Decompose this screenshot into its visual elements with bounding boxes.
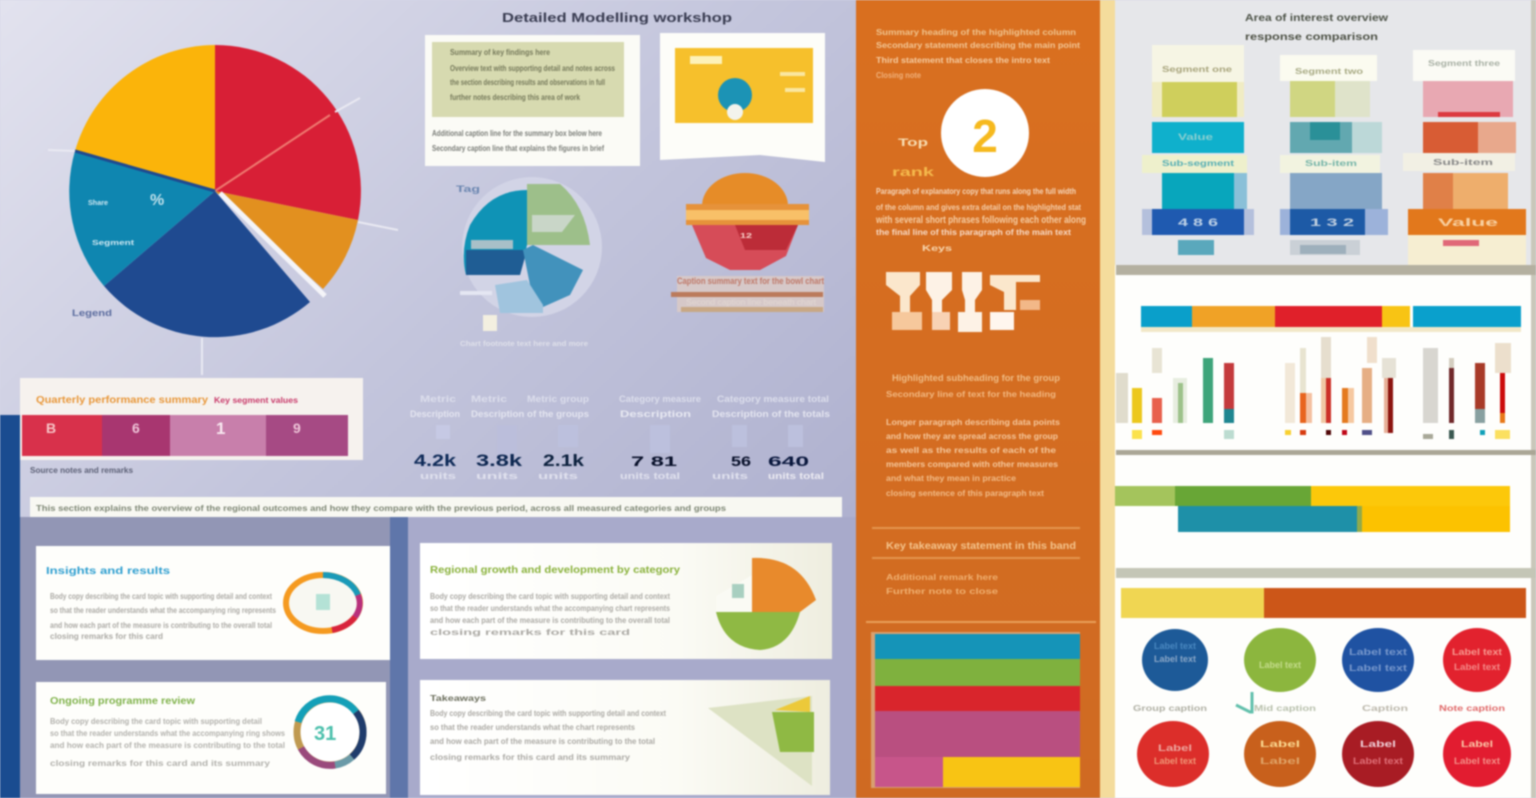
donut chart: Chart footnote text here and more <box>460 341 588 348</box>
icon: people row <box>886 272 1040 332</box>
stat columns: 2.1k <box>543 451 585 470</box>
badge captions: Mid caption <box>1254 704 1316 713</box>
badge row one <box>1142 628 1511 692</box>
panel: card three: Ongoing programme review <box>50 696 195 707</box>
panel: orange column: Highlighted subheading for the group <box>892 373 1060 384</box>
panel: color stat strip: 6 <box>132 420 140 436</box>
panel: card four: and how each part of the measure is contributing to the total <box>430 737 655 746</box>
panel: color stat strip: 1 <box>216 419 225 438</box>
panel: top text box: further notes describing this area of work <box>450 93 580 102</box>
panel: card four: closing remarks for this card and its summary <box>430 753 631 762</box>
badge row one: Label text <box>1454 662 1500 672</box>
panel: card three: Body copy describing the card topic with supporting detail <box>50 717 262 726</box>
title: center section: Detailed Modelling workshop <box>502 10 732 25</box>
column: warm stack: Segment three <box>1428 59 1501 68</box>
panel: right column background <box>1115 0 1536 798</box>
badge row two: Label <box>1260 756 1300 766</box>
stat columns: 3.8k <box>476 451 523 470</box>
pie chart: Segment <box>92 240 135 247</box>
panel: orange column: with several short phrases following each other along <box>875 215 1086 226</box>
panel: color stat strip: Key segment values <box>214 396 299 405</box>
badge row two: Label <box>1260 739 1300 749</box>
pie chart: Share <box>88 200 108 207</box>
icon: medal circle: 2 <box>972 110 998 162</box>
panel: card four: Body copy describing the card topic with supporting detail and context <box>430 709 666 718</box>
stat columns: 640 <box>768 453 809 469</box>
panel: color stat strip: Quarterly performance summary <box>36 395 208 406</box>
icon: bowl chart: 12 <box>740 233 752 240</box>
panel: orange column: the final line of this paragraph of the main text <box>876 227 1071 237</box>
panel: color stat strip: B <box>46 420 56 436</box>
panel: orange column: as well as the results of each of the <box>886 445 1056 455</box>
stat columns: Metric group <box>527 394 590 404</box>
panel: card two: Body copy describing the card topic with supporting detail and context <box>430 592 670 601</box>
gradient bar <box>1121 588 1526 618</box>
panel: card three <box>36 682 386 794</box>
stat columns: Category measure <box>619 394 701 404</box>
stat columns: 7 81 <box>631 453 677 469</box>
stat columns: 56 <box>731 453 751 469</box>
vertical divider <box>390 517 408 798</box>
icon: medal circle <box>941 89 1029 177</box>
badge row two: Label text <box>1154 756 1196 766</box>
badge row two <box>1137 721 1511 787</box>
stat columns: units total <box>768 471 824 481</box>
panel: top text box: Secondary caption line that explains the figures in brief <box>432 144 604 153</box>
badge captions: Group caption <box>1133 704 1207 713</box>
panel: color stat strip <box>20 378 363 460</box>
panel: orange column: Third statement that closes the intro text <box>876 55 1050 65</box>
panel: orange column: Key takeaway statement in this band <box>886 541 1076 552</box>
icon: cone chart <box>708 696 814 786</box>
panel: orange column: Further note to close <box>886 586 998 596</box>
badge row one: Label text <box>1349 663 1407 673</box>
panel: orange column: of the column and gives extra detail on the highlighted stat <box>876 202 1081 212</box>
badge row one: Label text <box>1349 647 1407 657</box>
stat columns: units <box>538 471 578 481</box>
column: blue stack: 4 8 6 <box>1178 217 1218 229</box>
badge row two: Label text <box>1353 756 1403 766</box>
panel: card one <box>36 546 390 660</box>
panel: card four: so that the reader understands what the chart represents <box>430 723 636 732</box>
badge captions: Note caption <box>1439 704 1505 713</box>
donut chart <box>456 177 602 348</box>
panel: color stat strip: 9 <box>293 420 301 436</box>
panel: top text box: Summary of key findings here <box>450 48 550 57</box>
panel: orange column: Paragraph of explanatory copy that runs along the full width <box>876 186 1076 196</box>
column: muted stack <box>1280 55 1388 255</box>
top color bar <box>1141 306 1521 332</box>
stat columns: Metric <box>471 394 507 404</box>
column: warm stack <box>1403 50 1526 265</box>
left blue stripe <box>0 415 20 798</box>
panel: orange column: Secondary line of text for the heading <box>886 389 1056 399</box>
icon: bowl chart <box>671 173 824 312</box>
panel: card three: and how each part of the measure is contributing to the total <box>50 741 285 750</box>
pie chart <box>48 45 398 375</box>
icon: bowl chart: Caption summary text for the bowl chart <box>677 276 824 286</box>
heading: right column <box>1245 13 1388 43</box>
stat columns: Description <box>410 409 460 419</box>
column: warm stack: Value <box>1438 217 1498 229</box>
panel: orange column: Secondary statement describing the main point <box>876 40 1080 50</box>
pie chart: % <box>150 192 164 209</box>
divider band <box>1116 568 1536 578</box>
panel: orange column <box>856 0 1115 798</box>
panel: card one: so that the reader understands what the accompanying ring represents <box>50 606 276 615</box>
stat columns: units <box>420 471 456 481</box>
heading: right column: response comparison <box>1245 32 1378 43</box>
badge row two: Label <box>1158 743 1192 753</box>
panel: card four <box>420 680 830 795</box>
divider band <box>1116 265 1536 275</box>
panel: card one: Body copy describing the card topic with supporting detail and context <box>50 592 272 601</box>
column: blue stack <box>1142 45 1254 255</box>
badge row two: Label text <box>1454 756 1500 766</box>
badge row one: Label text <box>1259 660 1301 670</box>
panel: card four: Takeaways <box>430 694 487 703</box>
lower left field <box>20 517 390 798</box>
panel: top text box: Overview text with supporting detail and notes across <box>450 64 615 73</box>
badge row one: Label text <box>1452 647 1502 657</box>
panel: yellow map card <box>660 33 825 162</box>
icon: ring chart <box>286 575 360 631</box>
icon: ring chart <box>297 699 363 765</box>
column: blue stack: Segment one <box>1162 65 1233 74</box>
stat columns: units total <box>620 471 680 481</box>
bar chart <box>1116 337 1511 439</box>
column: muted stack: 1 3 2 <box>1310 217 1354 229</box>
panel: card two: so that the reader understands what the accompanying chart represents <box>430 604 670 613</box>
badge row two: Label <box>1461 739 1493 749</box>
horizontal bars <box>1115 486 1510 532</box>
heading: right column: Area of interest overview <box>1245 13 1388 24</box>
stat columns: Description of the totals <box>712 409 830 419</box>
icon: pie mini <box>716 558 816 650</box>
panel: card three: closing remarks for this card and its summary <box>50 759 271 768</box>
panel: top text box: Additional caption line for the summary box below here <box>432 129 602 138</box>
panel: orange column: Summary heading of the highlighted column <box>876 27 1076 37</box>
column: blue stack: Sub-segment <box>1162 159 1234 168</box>
panel: card one: closing remarks for this card <box>50 632 163 641</box>
column: blue stack: Value <box>1178 132 1213 142</box>
caption: strip note: Source notes and remarks <box>30 466 134 475</box>
panel: card two <box>420 543 832 659</box>
icon: ring chart: 31 <box>314 723 336 745</box>
panel: top text box <box>425 35 640 166</box>
badge row two: Label <box>1360 739 1396 749</box>
stat columns: Metric <box>420 394 456 404</box>
stacked bars <box>871 632 1080 788</box>
panel: orange column: Closing note <box>876 70 921 80</box>
panel: orange column: Keys <box>922 244 953 253</box>
stat columns: units <box>712 471 748 481</box>
panel: orange column: Longer paragraph describing data points <box>886 417 1060 427</box>
background <box>0 0 856 798</box>
panel: orange column: Additional remark here <box>886 572 998 582</box>
label: medal side note: Top <box>898 137 928 149</box>
badge captions <box>1133 692 1505 713</box>
panel: orange column: and what they mean in practice <box>886 473 1016 483</box>
donut chart: Tag <box>456 184 480 194</box>
panel: orange column: closing sentence of this paragraph text <box>886 488 1044 498</box>
panel: card three: so that the reader understands what the accompanying ring shows <box>50 729 286 738</box>
panel: card one: and how each part of the measure is contributing to the overall total <box>50 621 272 630</box>
divider band <box>1116 450 1536 455</box>
band: note line: This section explains the overview of the regional outcomes and how they compare with the previous period, across all measured categories and groups <box>36 503 726 513</box>
panel: orange column: and how they are spread across the group <box>886 431 1058 441</box>
badge captions: Caption <box>1362 704 1408 713</box>
badge row one: Label text <box>1154 641 1196 651</box>
panel: card two: Regional growth and development by category <box>430 565 680 576</box>
panel: card two: closing remarks for this card <box>430 628 630 637</box>
stat columns: Description <box>620 409 691 419</box>
panel: top text box: the section describing results and observations in full <box>450 78 605 87</box>
icon: bowl chart: Second caption line beneath chart <box>686 298 817 307</box>
column: muted stack: Sub-item <box>1305 159 1357 168</box>
panel: card two: and how each part of the measure is contributing to the overall total <box>430 616 670 625</box>
panel: card one: Insights and results <box>46 566 171 577</box>
stat columns: Category measure total <box>717 394 829 404</box>
stat columns: 4.2k <box>414 451 457 470</box>
stat columns: units <box>476 471 518 481</box>
label: medal side note: rank <box>892 165 935 179</box>
stat columns <box>410 394 830 481</box>
column: warm stack: Sub-item <box>1433 158 1493 167</box>
pie chart: Legend <box>72 308 112 318</box>
column: muted stack: Segment two <box>1295 67 1363 76</box>
band: note line <box>30 497 842 517</box>
badge row one: Label text <box>1154 654 1196 664</box>
panel: orange column: members compared with other measures <box>886 459 1058 469</box>
label: medal side note <box>892 137 935 179</box>
stat columns: Description of the groups <box>471 409 589 419</box>
